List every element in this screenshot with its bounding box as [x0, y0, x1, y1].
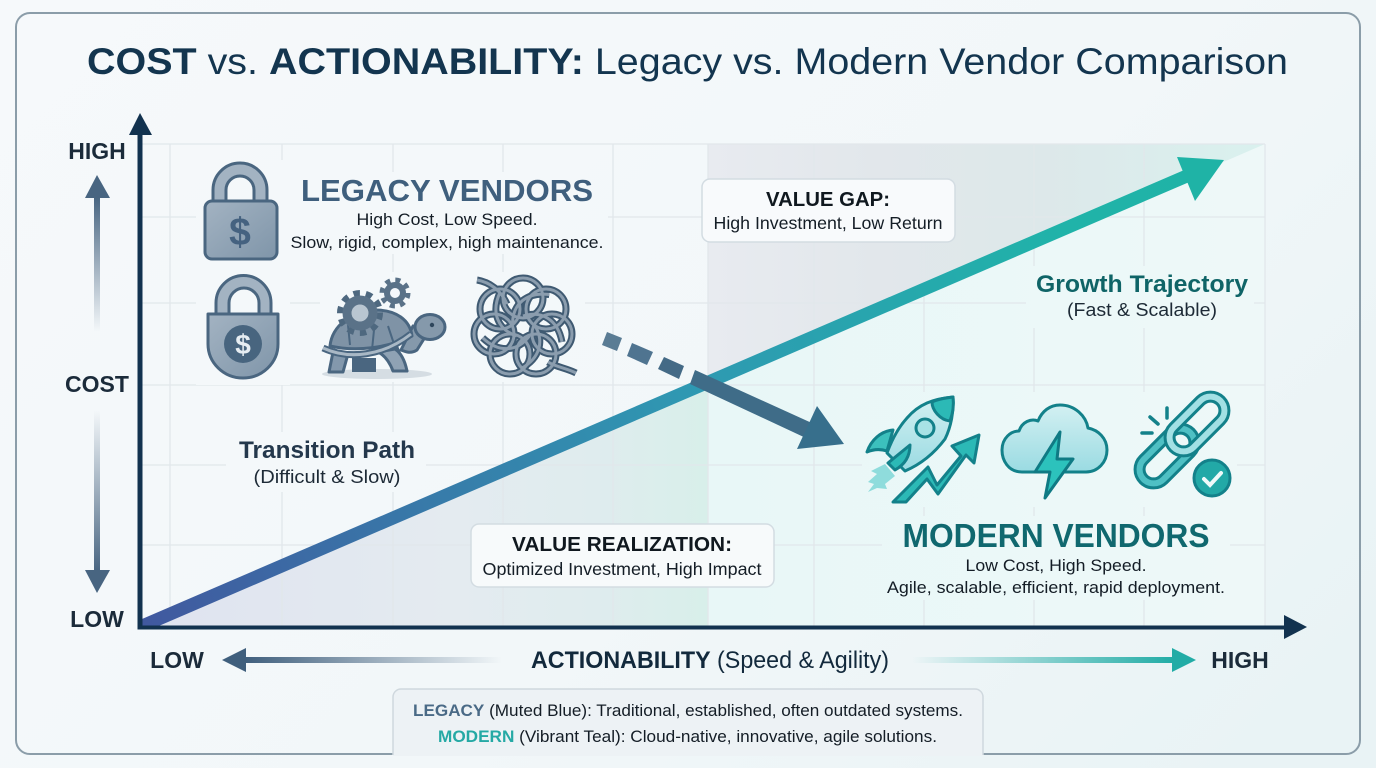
callout: value gap — [702, 179, 955, 242]
callout: value realization: VALUE REALIZATION: — [512, 534, 732, 556]
y axis labels: LOW — [70, 606, 124, 632]
modern description: Low Cost, High Speed. — [966, 556, 1146, 575]
actionability label: ACTIONABILITY (Speed & Agility) — [531, 647, 889, 674]
y axis — [129, 113, 152, 629]
y axis labels — [65, 138, 129, 632]
growth trajectory label: (Fast & Scalable) — [1067, 300, 1217, 320]
icon: lock with dollar (square) — [205, 163, 277, 259]
low label: LOW — [150, 647, 204, 673]
legacy vendors text block — [290, 173, 604, 252]
legend: modern: MODERN (Vibrant Teal): Cloud-native, innovative, agile solutions. — [438, 727, 937, 746]
growth trajectory label: Growth Trajectory — [1036, 271, 1249, 298]
legend box — [393, 689, 983, 756]
modern vendors text block: Agile, scalable, efficient, rapid deployment. — [887, 578, 1225, 597]
cost arrow down — [85, 410, 110, 593]
icon: lock with dollar (round) — [208, 276, 278, 378]
legacy heading: LEGACY VENDORS — [301, 173, 593, 208]
legend: legacy: LEGACY (Muted Blue): Traditional, established, often outdated systems. — [413, 701, 963, 720]
callout: value gap: VALUE GAP: — [766, 189, 890, 211]
legacy vendors text block: Slow, rigid, complex, high maintenance. — [290, 233, 604, 252]
actionability arrow right — [912, 648, 1196, 672]
growth trajectory arrow — [130, 157, 1224, 631]
quadrant shading: under trend line — [140, 385, 708, 627]
icon: tangled knot — [474, 278, 576, 374]
callout: value realization: Optimized Investment, High Impact — [482, 559, 762, 579]
icon: turtle with gears — [322, 280, 445, 379]
quadrant shading: right side below trend — [708, 144, 1265, 627]
actionability arrow left — [222, 648, 502, 672]
quadrant shading: upper triangle value gap — [708, 144, 1265, 385]
icon: chain link with check — [1134, 391, 1230, 496]
icon: rocket with growth arrow — [867, 397, 979, 502]
icon: cloud with lightning — [1002, 405, 1107, 498]
y axis labels: COST — [65, 371, 129, 397]
chart: cost vs actionability — [129, 113, 1307, 639]
callout: value realization — [471, 524, 774, 587]
transition path label: Transition Path — [239, 437, 415, 464]
legacy description: High Cost, Low Speed. — [356, 210, 538, 229]
icon: lock with dollar (square): $ — [229, 211, 251, 254]
cost arrow up — [85, 175, 110, 332]
callout: value gap: High Investment, Low Return — [714, 213, 942, 233]
transition path label — [239, 437, 415, 487]
icon: lock with dollar (round): $ — [235, 329, 251, 360]
high label: HIGH — [1211, 647, 1269, 673]
modern vendors text block — [887, 517, 1225, 597]
y axis labels: HIGH — [68, 138, 126, 164]
title: COST vs. ACTIONABILITY: Legacy vs. Modern Vendor Comparison — [87, 41, 1288, 82]
modern heading: MODERN VENDORS — [902, 517, 1210, 554]
x axis — [138, 615, 1307, 639]
transition arrow (dashed) — [602, 332, 844, 449]
growth trajectory label — [1036, 271, 1249, 320]
transition path label: (Difficult & Slow) — [254, 467, 400, 487]
x axis labels — [150, 647, 1269, 674]
